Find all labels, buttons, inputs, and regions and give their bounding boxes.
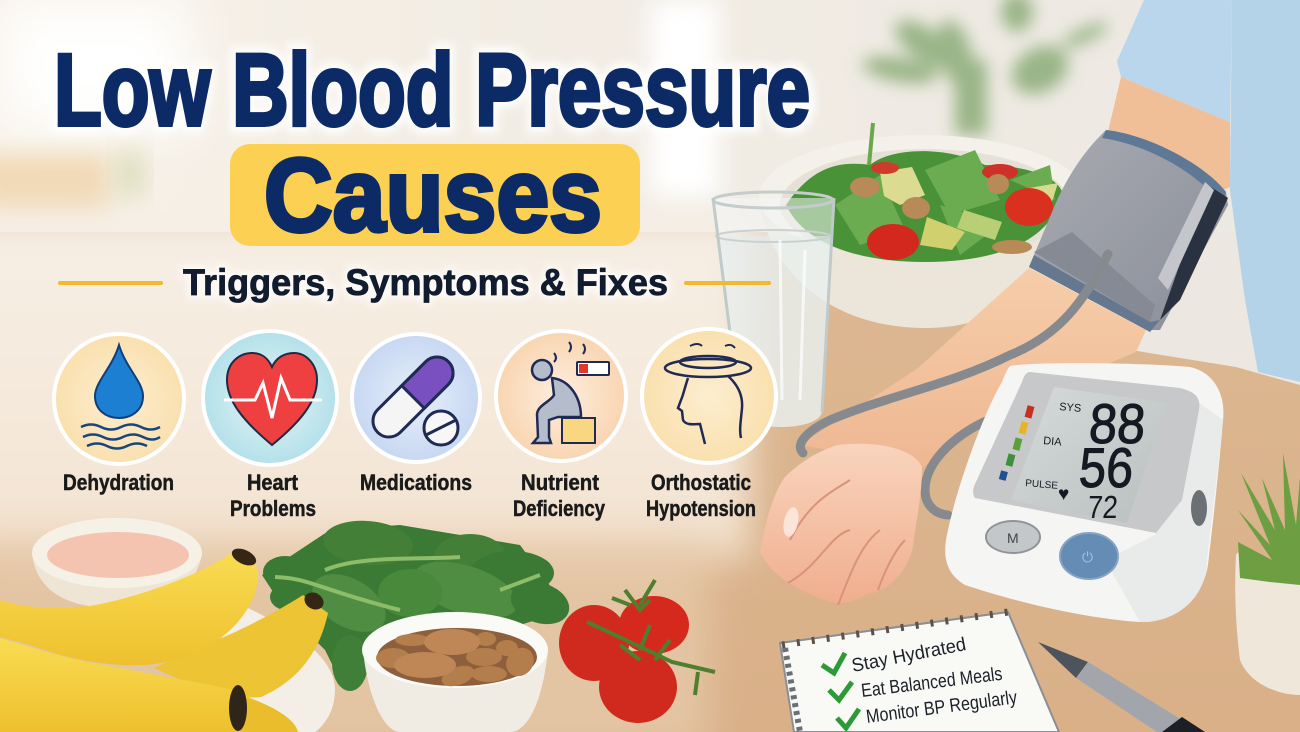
almond bowl: [362, 612, 548, 732]
subtitle: Triggers, Symptoms & Fixes: [183, 262, 668, 303]
severity bars: [999, 405, 1034, 481]
water glass: [713, 192, 834, 427]
hand: [760, 444, 922, 605]
plant pot: [1235, 453, 1300, 695]
check marks: [822, 653, 859, 728]
icon: heart with pulse: [203, 331, 337, 465]
plate: [200, 600, 335, 732]
spinach: [262, 517, 575, 691]
pen: [1038, 642, 1205, 732]
blood pressure monitor: [945, 363, 1223, 622]
subtitle: Triggers, Symptoms & Fixes: [183, 262, 668, 303]
salt bowl: [32, 518, 202, 608]
causes badge: Causes: [264, 138, 602, 254]
arm: [800, 77, 1230, 468]
monitor buttons: [986, 490, 1207, 579]
monitor readings: 88: [1087, 392, 1148, 455]
icon: water drop: [54, 334, 184, 464]
monitor readings: [1025, 392, 1148, 525]
title: Low Blood Pressure: [52, 33, 812, 147]
icon: tired person and low battery: [496, 331, 626, 461]
monitor readings: SYS: [1059, 401, 1082, 415]
cause: heart problems: Heart: [247, 470, 299, 495]
cause: heart problems: [203, 331, 337, 521]
torso and shirt: [1117, 0, 1300, 382]
table: [0, 215, 1300, 732]
monitor readings: 56: [1077, 436, 1136, 499]
monitor buttons: ⏻: [1082, 549, 1093, 565]
checklist text: [850, 634, 1019, 728]
monitor buttons: M: [1007, 530, 1019, 546]
checklist text: Eat Balanced Meals: [860, 664, 1004, 702]
monitor readings: 72: [1087, 489, 1119, 525]
cause: nutrient deficiency: Nutrient: [521, 470, 600, 495]
subtitle: [58, 262, 771, 303]
cause: dehydration: [54, 334, 184, 495]
checklist text: Stay Hydrated: [850, 634, 968, 677]
cause: orthostatic hypotension: [642, 329, 776, 521]
cause: heart problems: Problems: [230, 496, 316, 521]
icon: dizzy head: [642, 329, 776, 463]
cause: medications: Medications: [360, 470, 472, 495]
cause: orthostatic hypotension: Orthostatic: [651, 470, 751, 495]
cause: medications: [352, 334, 480, 495]
salad bowl: [759, 123, 1086, 328]
title: Low Blood Pressure: [54, 33, 810, 147]
cause: nutrient deficiency: Deficiency: [513, 496, 606, 521]
monitor readings: DIA: [1043, 435, 1063, 449]
tomatoes: [559, 580, 715, 723]
cuff cable: [800, 254, 1108, 515]
notepad and checklist: [780, 612, 1059, 732]
checklist text: Monitor BP Regularly: [865, 687, 1019, 728]
cause: orthostatic hypotension: Hypotension: [646, 496, 756, 521]
cause: dehydration: Dehydration: [63, 470, 174, 495]
cuff: [1029, 130, 1228, 332]
monitor readings: PULSE: [1025, 478, 1059, 492]
icon: pill and tablet: [352, 334, 480, 462]
monitor readings: ♥: [1058, 484, 1069, 505]
cause: nutrient deficiency: [496, 331, 626, 521]
bananas: [0, 545, 328, 732]
